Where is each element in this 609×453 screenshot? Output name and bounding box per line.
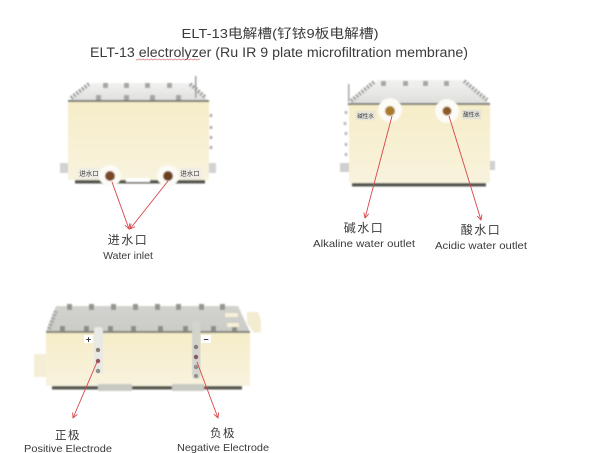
caption: acidic water outlet: Acidic water outlet: [435, 240, 527, 252]
caption: water inlet: [103, 233, 153, 262]
title: English: ELT-13 electrolyzer (Ru IR 9 plate microfiltration membrane): [90, 45, 468, 60]
electrolyzer: outlet view: [313, 80, 527, 252]
photo: side unit: [34, 304, 261, 391]
caption: alkaline water outlet: Alkaline water outlet: [313, 238, 415, 250]
port: alkaline outlet: [378, 98, 402, 122]
label: alkaline: 碱性水: [357, 112, 374, 120]
caption: alkaline water outlet: 碱水口: [344, 221, 384, 235]
positive electrode bar: +: [86, 334, 91, 344]
caption: water inlet: 进水口: [108, 233, 148, 247]
caption: acidic water outlet: [435, 222, 527, 252]
caption: positive electrode: [24, 428, 112, 453]
arrow: acidic: [449, 116, 481, 220]
caption: positive electrode: 正极: [55, 428, 81, 442]
port: left inlet: [99, 165, 121, 187]
electrolyzer: water inlet view: [60, 76, 216, 262]
caption: acidic water outlet: 酸水口: [461, 222, 501, 237]
port: acidic outlet: [435, 99, 459, 123]
spell-check underline: electrolyzer: [136, 59, 200, 60]
arrow: alkaline: [365, 116, 392, 218]
caption: water inlet: Water inlet: [103, 250, 153, 262]
label: inlet right: 进水口: [180, 168, 200, 178]
caption: negative electrode: 负极: [210, 426, 236, 440]
electrolyzer: electrode view: [24, 304, 269, 453]
negative electrode bar: −: [203, 334, 209, 344]
label: acidic: 酸性水: [463, 110, 480, 118]
negative electrode bar: [192, 320, 211, 379]
positive electrode bar: [84, 327, 103, 374]
arrow: left inlet: [112, 182, 129, 229]
title: [90, 26, 468, 60]
caption: negative electrode: [177, 426, 269, 453]
photo: front unit: [60, 76, 216, 184]
port: right inlet: [157, 165, 179, 187]
arrow: positive: [73, 362, 97, 418]
label: inlet left: 进水口: [79, 168, 99, 178]
title: Chinese: ELT-13电解槽(钌铱9板电解槽): [182, 26, 378, 41]
arrow: negative: [197, 362, 218, 418]
arrow: right inlet: [130, 181, 168, 229]
caption: alkaline water outlet: [313, 221, 415, 250]
photo: rear unit: [340, 80, 495, 186]
